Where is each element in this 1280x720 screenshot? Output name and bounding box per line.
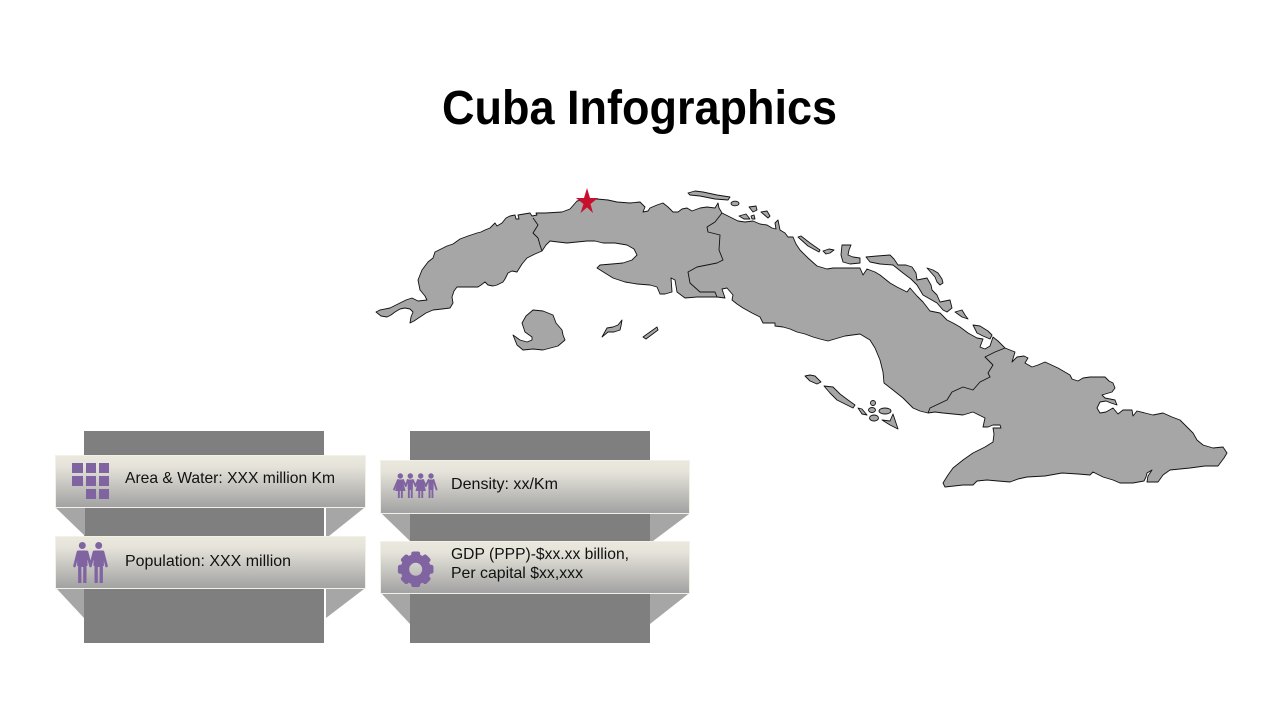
population bar bbox=[56, 536, 366, 588]
density bar bbox=[380, 460, 690, 514]
backing panel bbox=[410, 431, 650, 643]
star: capital bbox=[576, 188, 598, 213]
GDP bar bbox=[380, 542, 690, 594]
panel: left stack bbox=[56, 431, 366, 643]
area and water bar bbox=[56, 456, 366, 508]
GDP bar: Per capital $xx,xxx bbox=[451, 565, 583, 582]
population bar: Population: XXX million bbox=[125, 553, 291, 570]
fold shapes bbox=[382, 514, 410, 541]
panel: right stack bbox=[380, 431, 690, 643]
title: Cuba Infographics bbox=[442, 82, 837, 135]
backing panel bbox=[84, 431, 324, 643]
southern cays bbox=[602, 320, 622, 337]
province borders bbox=[533, 213, 1005, 413]
northern cays bbox=[688, 191, 730, 200]
area and water bar: Area & Water: XXX million Km bbox=[125, 470, 335, 487]
icon: grid bbox=[72, 463, 109, 499]
icon: two people bbox=[74, 542, 106, 583]
icon: gear bbox=[398, 552, 434, 587]
mainland bbox=[376, 199, 1227, 487]
icon: four people bbox=[394, 473, 436, 498]
map of Cuba bbox=[376, 188, 1227, 487]
density bar: Density: xx/Km bbox=[451, 476, 558, 493]
Isla de la Juventud bbox=[513, 310, 565, 350]
GDP bar: GDP (PPP)-$xx.xx billion, bbox=[451, 546, 629, 563]
fold shapes bbox=[56, 508, 85, 536]
